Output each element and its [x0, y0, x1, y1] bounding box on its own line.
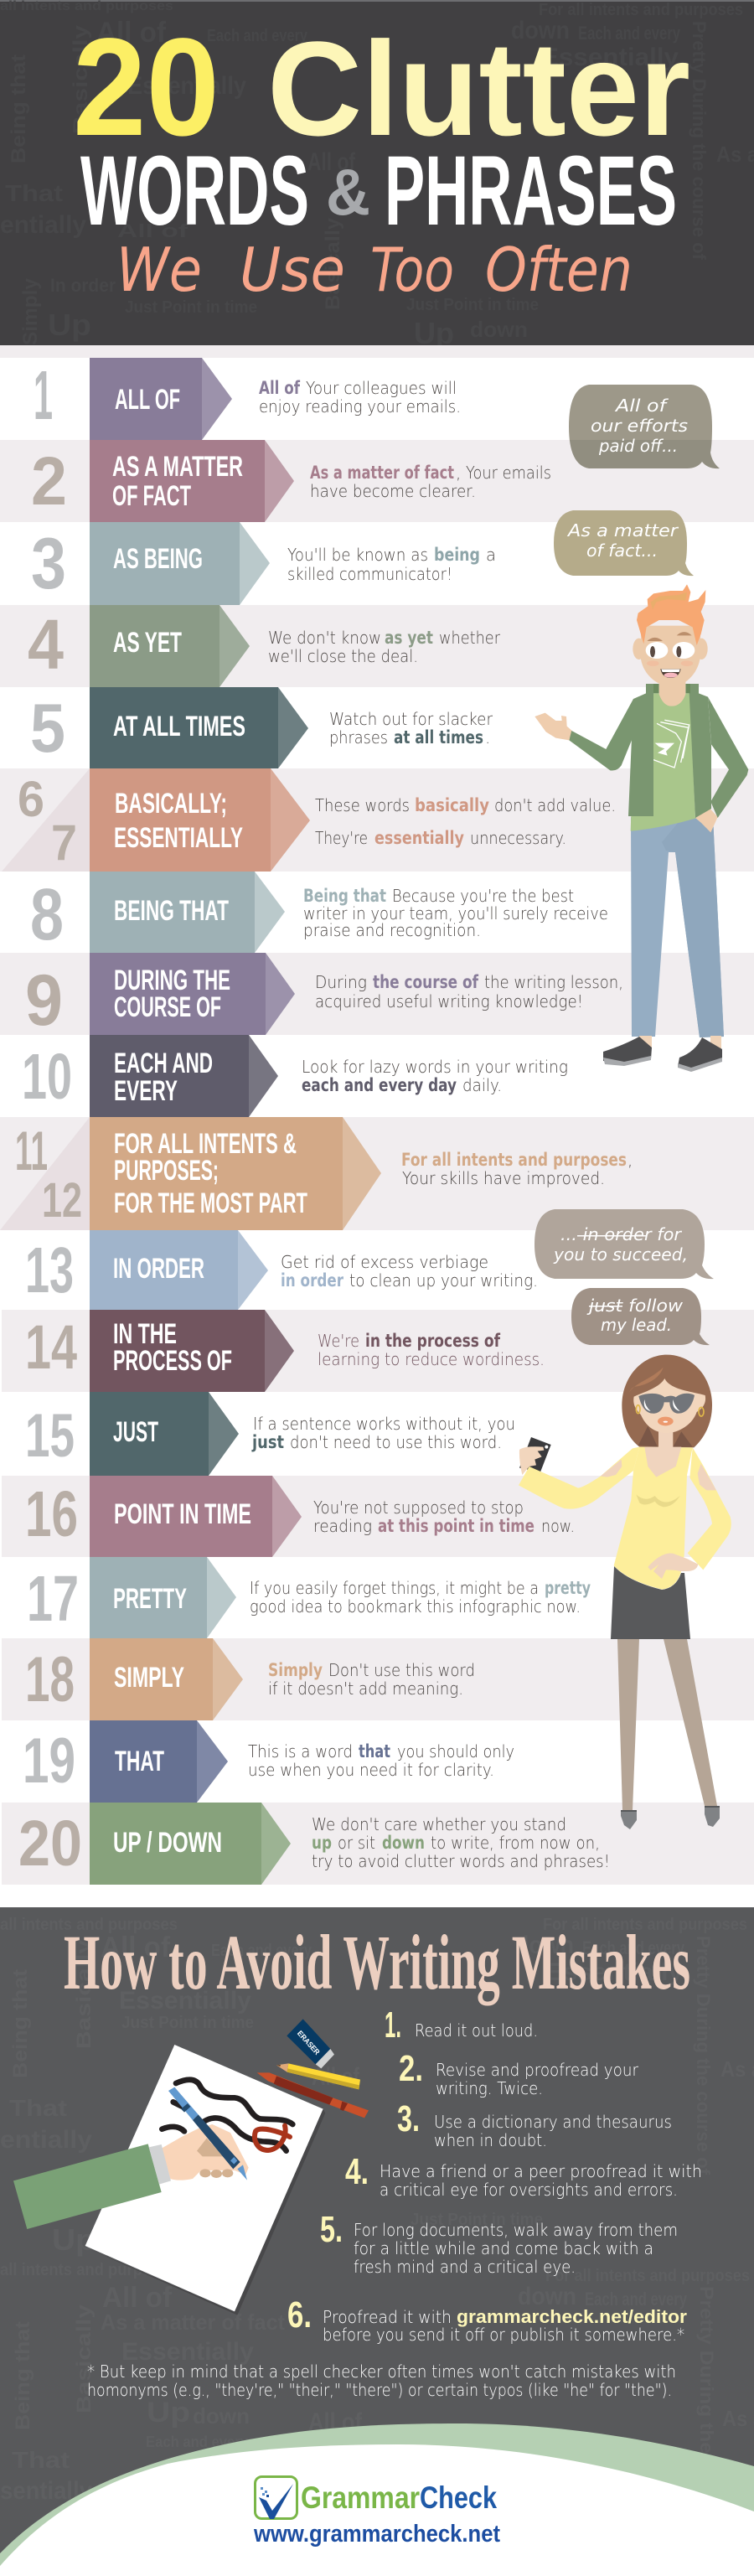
- example text 14: [318, 1331, 545, 1369]
- arrow: that: THAT: [115, 1746, 164, 1777]
- header panel: Basically: [322, 217, 344, 310]
- example text 5: [329, 709, 493, 747]
- icon: yellow pencil: [276, 2063, 360, 2089]
- header panel: Just Point in time: [406, 296, 539, 314]
- example text 14: learning to reduce wordiness.: [318, 1349, 545, 1369]
- number 3: 3: [31, 524, 66, 604]
- example text 3: a: [486, 545, 496, 565]
- example text 13: [281, 1252, 538, 1291]
- example text 8: Because you're the best: [392, 886, 574, 906]
- speech bubble: in order for you to succeed: ... in order for: [560, 1224, 683, 1244]
- example text 16: at this point in time: [378, 1516, 535, 1536]
- row 8: being that: [0, 872, 754, 955]
- panel: how to avoid writing mistakes: Each and every: [146, 2434, 248, 2450]
- website url: www.grammarcheck.net: [253, 2521, 500, 2548]
- header panel: entially: [0, 211, 86, 239]
- example text 11-12: Your skills have improved.: [402, 1168, 605, 1188]
- example text 17: pretty: [545, 1578, 591, 1598]
- step 5: [320, 2209, 678, 2277]
- panel: how to avoid writing mistakes: Essentially: [545, 1958, 683, 1986]
- panel: how to avoid writing mistakes: Being that: [12, 2321, 34, 2430]
- number 14: 14: [25, 1312, 77, 1382]
- example text 20: to write, from now on,: [431, 1833, 600, 1853]
- example text 20: up: [312, 1833, 332, 1853]
- number 6: 6: [18, 771, 44, 827]
- example text 8: writer in your team, you'll surely receive: [303, 903, 608, 923]
- arrow: as being: [90, 522, 270, 605]
- example text 11-12: For all intents and purposes: [401, 1150, 627, 1170]
- step 3: 3.: [397, 2098, 420, 2139]
- panel: how to avoid writing mistakes: Essentially: [119, 1987, 251, 2015]
- panel: how to avoid writing mistakes: all intents and purposes: [0, 2261, 178, 2279]
- example text 19: use when you need it for clarity.: [248, 1760, 494, 1780]
- speech bubble: all of our efforts paid off: paid off...: [598, 436, 678, 456]
- row 9: during the course of: [0, 953, 754, 1041]
- step 6: before you send it off or publish it somewhere.*: [323, 2325, 684, 2345]
- number 20: 20: [18, 1808, 82, 1880]
- step 6: 6.: [287, 2294, 312, 2335]
- panel: how to avoid writing mistakes: Up: [52, 2222, 96, 2257]
- arrow: as a matter of fact: OF FACT: [112, 480, 191, 512]
- panel: how to avoid writing mistakes: [0, 1907, 754, 2576]
- arrow: all of: [90, 358, 232, 440]
- speech bubble: as a matter of fact: [554, 510, 694, 576]
- example text 19: you should only: [397, 1741, 514, 1761]
- illustration: hand writing on paper: [13, 2045, 325, 2315]
- number 5: 5: [30, 689, 65, 767]
- example text 2: [310, 463, 551, 501]
- title: [73, 10, 690, 305]
- example text 19: [248, 1741, 514, 1780]
- subtitle: Often: [485, 235, 633, 305]
- number 12: 12: [42, 1173, 82, 1228]
- example text 1: Your colleagues will: [306, 378, 457, 398]
- example text 1: enjoy reading your emails.: [259, 396, 461, 416]
- arrow: being that: BEING THAT: [114, 895, 229, 927]
- example text 4: We don't know: [268, 628, 381, 648]
- example text 6-7: These words: [315, 795, 410, 815]
- panel: how to avoid writing mistakes: Each and every: [211, 1942, 312, 1960]
- header panel: down: [470, 317, 528, 342]
- arrow: in the process of: IN THE: [113, 1318, 177, 1350]
- example text 8: [303, 886, 608, 940]
- example text 6-7: don't add value.: [494, 795, 616, 815]
- panel: how to avoid writing mistakes: That: [12, 2447, 70, 2473]
- example text 6-7: unnecessary.: [470, 828, 566, 848]
- example text 10: each and every day: [302, 1075, 457, 1095]
- row 19: that: [0, 1720, 754, 1803]
- arrow: simply: [90, 1638, 243, 1720]
- speech bubble: just follow my lead: my lead.: [601, 1315, 672, 1335]
- example text 9: acquired useful writing knowledge!: [315, 991, 583, 1011]
- example text 20: down: [382, 1833, 425, 1853]
- example text 18: Don't use this word: [328, 1660, 475, 1680]
- panel: how to avoid writing mistakes: Just Point in time: [411, 2211, 543, 2229]
- row 6-7: basically; essentially: [0, 768, 754, 872]
- character: man: [535, 584, 748, 1072]
- row 4: as yet: [0, 605, 754, 687]
- arrow: during the course of: COURSE OF: [114, 991, 221, 1023]
- example text 2: Your emails: [466, 463, 551, 483]
- arrow: each and every: [90, 1035, 278, 1117]
- example text 4: as yet: [385, 628, 433, 648]
- example text 16: You're not supposed to stop: [313, 1497, 524, 1518]
- arrow: as a matter of fact: [90, 440, 294, 522]
- example text 16: reading: [313, 1516, 372, 1536]
- example text 4: [268, 628, 501, 666]
- arrow: in the process of: [90, 1310, 294, 1392]
- arrow: for all intents and purposes; for the most part: [90, 1117, 381, 1230]
- example text 20: [312, 1814, 610, 1871]
- arrow: as being: AS BEING: [113, 543, 203, 575]
- panel: how to avoid writing mistakes: Basically: [73, 1939, 96, 2049]
- example text 18: if it doesn't add meaning.: [268, 1679, 463, 1699]
- example text 11-12: [401, 1150, 633, 1188]
- row 17: pretty: [0, 1557, 754, 1638]
- speech bubble: as a matter of fact: of fact...: [586, 541, 658, 561]
- arrow: in order: IN ORDER: [113, 1253, 204, 1285]
- example text 10: Look for lazy words in your writing: [302, 1057, 568, 1077]
- example text 6-7: basically: [415, 795, 489, 815]
- number 4: 4: [28, 605, 64, 684]
- panel: how to avoid writing mistakes: entially: [0, 2126, 92, 2154]
- example text 4: we'll close the deal.: [268, 646, 418, 666]
- example text 8: Being that: [303, 886, 386, 906]
- panel: how to avoid writing mistakes: All of: [101, 1932, 171, 1963]
- panel: how to avoid writing mistakes: Up: [147, 2397, 190, 2429]
- step 4: Have a friend or a peer proofread it with: [380, 2161, 702, 2181]
- panel: how to avoid writing mistakes: Pretty During the: [696, 2286, 717, 2454]
- character: woman: [519, 1355, 731, 1829]
- header panel: Up: [414, 316, 454, 350]
- example text 13: to clean up your writing.: [349, 1270, 538, 1291]
- row 13: in order: [0, 1230, 754, 1310]
- arrow: each and every: EVERY: [114, 1075, 178, 1107]
- header panel: Being that: [8, 54, 30, 163]
- arrow: each and every: EACH AND: [114, 1047, 213, 1079]
- row 16: point in time: [2, 1476, 754, 1557]
- step 6: grammarcheck.net/editor: [457, 2306, 687, 2327]
- example text 19: This is a word: [248, 1741, 353, 1761]
- title: Words: WORDS: [80, 136, 309, 246]
- row 5: at all times: [0, 687, 754, 768]
- example text 9: the writing lesson,: [484, 972, 623, 992]
- step 4: a critical eye for oversights and errors.: [380, 2180, 678, 2200]
- step 4: 4.: [345, 2151, 369, 2192]
- example text 5: .: [485, 727, 490, 747]
- example text 19: that: [359, 1741, 390, 1761]
- step 2: writing. Twice.: [436, 2078, 543, 2098]
- steps list: [287, 2004, 702, 2345]
- header panel: All of: [96, 17, 167, 49]
- row 14: in the process of: [2, 1310, 754, 1392]
- example text 20: or sit: [338, 1833, 375, 1853]
- panel: how to avoid writing mistakes: all intents and purposes: [0, 1916, 178, 1934]
- step 3: [397, 2098, 672, 2150]
- example text 1: All of: [259, 378, 301, 398]
- arrow: pretty: [90, 1557, 236, 1638]
- example text 13: in order: [281, 1270, 344, 1291]
- number 10: 10: [22, 1041, 72, 1113]
- speech bubble: in order for you to succeed: you to succeed,: [553, 1244, 688, 1265]
- row 10: each and every: [0, 1035, 754, 1117]
- example text 15: don't need to use this word.: [290, 1432, 502, 1452]
- example text 5: phrases: [329, 727, 388, 747]
- example text 9: the course of: [373, 972, 479, 992]
- number 13: 13: [25, 1234, 74, 1306]
- example text 15: just: [251, 1432, 284, 1452]
- example text 1: [259, 378, 461, 416]
- arrow: as a matter of fact: AS A MATTER: [112, 451, 243, 483]
- subtitle: We: [116, 235, 202, 305]
- arrow: during the course of: [90, 953, 295, 1035]
- header panel: Up: [48, 308, 91, 342]
- row 3: as being: [0, 522, 754, 605]
- speech bubble: all of our efforts paid off: [569, 385, 720, 468]
- arrow: in the process of: PROCESS OF: [113, 1345, 232, 1377]
- number 16: 16: [25, 1478, 78, 1550]
- example text 17: good idea to bookmark this infographic now.: [250, 1596, 581, 1616]
- arrow: up / down: [90, 1803, 291, 1885]
- arrow: for all intents and purposes; for the most part: FOR ALL INTENTS &: [114, 1128, 297, 1160]
- header panel: That: [5, 180, 63, 206]
- panel: how to avoid writing mistakes: All of: [308, 2408, 363, 2436]
- icon: eraser: [287, 2019, 334, 2068]
- step 1: [385, 2004, 538, 2046]
- header panel: Pretty During the course of: [689, 21, 710, 261]
- example text 2: have become clearer.: [310, 481, 476, 501]
- arrow: as yet: [90, 605, 250, 687]
- number 9: 9: [25, 960, 63, 1041]
- speech bubble: all of our efforts paid off: All of: [614, 396, 669, 416]
- arrow: being that: [90, 872, 285, 953]
- panel: how to avoid writing mistakes: Each and every: [582, 1937, 685, 1958]
- arrow: all of: ALL OF: [115, 384, 180, 416]
- step 2: Revise and proofread your: [436, 2060, 639, 2080]
- arrow: basically; essentially: BASICALLY;: [115, 788, 227, 820]
- speech bubble: just follow my lead: just follow: [586, 1296, 684, 1316]
- header panel: Each and every: [207, 27, 308, 45]
- step 5: for a little while and come back with a: [354, 2238, 653, 2258]
- example text 10: [302, 1057, 568, 1095]
- number 17: 17: [27, 1563, 79, 1635]
- header panel: All of: [307, 148, 356, 176]
- example text 20: try to avoid clutter words and phrases!: [312, 1851, 610, 1871]
- footnote: * But keep in mind that a spell checker often times won't catch mistakes with: [87, 2361, 676, 2382]
- example text 20: We don't care whether you stand: [312, 1814, 566, 1834]
- example text 11-12: ,: [627, 1150, 633, 1170]
- example text 15: [251, 1414, 515, 1452]
- arrow: basically; essentially: [90, 768, 310, 872]
- number 15: 15: [25, 1402, 75, 1470]
- example text 6-7: essentially: [374, 828, 464, 848]
- header panel: All of: [117, 220, 188, 241]
- example text 8: praise and recognition.: [303, 920, 481, 940]
- step 3: Use a dictionary and thesaurus: [434, 2112, 672, 2132]
- arrow: for all intents and purposes; for the most part: PURPOSES;: [114, 1155, 219, 1187]
- arrow: in order: [90, 1230, 268, 1310]
- footnote: [87, 2361, 676, 2400]
- panel: how to avoid writing mistakes: All of: [312, 2063, 360, 2091]
- example text 2: As a matter of fact: [310, 463, 454, 483]
- example text 17: If you easily forget things, it might be a: [250, 1578, 539, 1598]
- arrow: pretty: PRETTY: [113, 1583, 187, 1615]
- subtitle: Use: [240, 235, 345, 305]
- panel: how to avoid writing mistakes: All of: [102, 2282, 173, 2314]
- example text 14: in the process of: [365, 1331, 501, 1351]
- header panel: Essentially: [541, 44, 679, 71]
- example text 4: whether: [439, 628, 501, 648]
- speech bubble: in order for you to succeed: [535, 1209, 714, 1279]
- example text 9: [315, 972, 623, 1011]
- step 1: Read it out loud.: [415, 2020, 538, 2041]
- header panel: down: [511, 17, 570, 44]
- footer arc: [0, 2423, 754, 2576]
- header panel: Each and every: [578, 23, 681, 44]
- panel: how to avoid writing mistakes: sentially: [0, 2477, 92, 2505]
- panel: how to avoid writing mistakes: As a matter of fact: [101, 2310, 285, 2335]
- step 4: [345, 2151, 702, 2200]
- number 8: 8: [30, 874, 64, 955]
- row 11-12: for all intents and purposes; for the most part: [0, 1117, 754, 1230]
- panel: how to avoid writing mistakes: Being that: [9, 1969, 32, 2078]
- step 2: [399, 2048, 639, 2098]
- icon: eraser: ERASER: [296, 2029, 322, 2056]
- number 7: 7: [51, 815, 77, 871]
- arrow: during the course of: DURING THE: [114, 965, 230, 996]
- header panel: [0, 0, 754, 350]
- footnote: homonyms (e.g., "they're," "their," "there") or certain typos (like "he" for "the").: [87, 2380, 672, 2400]
- example text 10: daily.: [462, 1075, 502, 1095]
- example text 3: being: [434, 545, 480, 565]
- example text 16: [313, 1497, 575, 1536]
- logo: grammarcheck: [253, 2477, 500, 2548]
- speech bubble: as a matter of fact: As a matter: [566, 520, 679, 541]
- speech bubble: just follow my lead: [571, 1288, 710, 1345]
- title: Clutter: Clutter: [267, 13, 690, 163]
- panel: how to avoid writing mistakes: down: [193, 2403, 250, 2429]
- example text 6-7: [315, 795, 616, 848]
- step 6: [287, 2294, 687, 2345]
- step 1: 1.: [385, 2004, 401, 2046]
- row 15: just: [0, 1392, 754, 1476]
- example text 14: We're: [318, 1331, 359, 1351]
- arrow: basically; essentially: ESSENTIALLY: [114, 822, 243, 854]
- row 2: as a matter of fact: [0, 440, 754, 522]
- row 18: simply: [2, 1638, 754, 1720]
- example text 18: Simply: [268, 1660, 323, 1680]
- icon: red crayon: [257, 2072, 369, 2118]
- step 3: when in doubt.: [434, 2130, 547, 2150]
- arrow: just: JUST: [113, 1416, 158, 1448]
- example text 17: [250, 1578, 591, 1616]
- header panel: Essentially: [127, 72, 246, 100]
- number 11: 11: [15, 1120, 48, 1182]
- step 5: 5.: [320, 2209, 343, 2250]
- step 2: 2.: [399, 2048, 423, 2089]
- panel: how to avoid writing mistakes: Basically: [73, 2304, 96, 2413]
- example text 3: [287, 545, 496, 584]
- number 19: 19: [23, 1725, 75, 1797]
- number 18: 18: [25, 1644, 75, 1715]
- row 20: up / down: [2, 1803, 754, 1885]
- example text 3: skilled communicator!: [287, 564, 452, 584]
- arrow: as yet: AS YET: [113, 627, 182, 659]
- example text 3: You'll be known as: [287, 545, 428, 565]
- title: 20: 20: [73, 10, 219, 165]
- panel: how to avoid writing mistakes: Each and every: [585, 2289, 688, 2310]
- arrow: that: [90, 1720, 228, 1803]
- header panel: Just Point in time: [125, 298, 257, 317]
- row 1: all of: 1: [34, 356, 53, 434]
- example text 5: Watch out for slacker: [329, 709, 493, 729]
- header panel: In order: [50, 275, 116, 296]
- example text 16: now.: [541, 1516, 575, 1536]
- subtitle: [116, 235, 633, 305]
- example text 2: ,: [456, 463, 461, 483]
- panel: how to avoid writing mistakes: Essentially: [121, 2338, 254, 2366]
- example text 15: If a sentence works without it, you: [253, 1414, 515, 1434]
- panel: how to avoid writing mistakes: Just Point in time: [121, 2014, 254, 2032]
- header panel: Basically: [70, 24, 92, 134]
- header panel: Simply: [19, 277, 42, 345]
- step 5: For long documents, walk away from them: [354, 2220, 678, 2240]
- wordmark: Check: [420, 2480, 497, 2515]
- subtitle: Too: [370, 235, 454, 305]
- arrow: up / down: UP / DOWN: [113, 1827, 222, 1859]
- panel: how to avoid writing mistakes: down: [518, 2283, 576, 2310]
- panel: how to avoid writing mistakes: Pretty During the course of: [693, 1936, 714, 2175]
- arrow: for all intents and purposes; for the most part: FOR THE MOST PART: [114, 1187, 307, 1219]
- arrow: simply: SIMPLY: [114, 1662, 184, 1694]
- example text 5: at all times: [394, 727, 483, 747]
- wordmark: Grammar: [301, 2480, 420, 2515]
- arrow: point in time: [90, 1476, 302, 1557]
- speech bubble: all of our efforts paid off: our efforts: [591, 416, 688, 436]
- number 2: 2: [31, 443, 67, 520]
- example text 18: [268, 1660, 475, 1699]
- example text 6-7: They're: [315, 828, 368, 848]
- example text 9: During: [315, 972, 367, 992]
- step 6: Proofread it with: [323, 2307, 452, 2327]
- icon: logo checkmark: [255, 2477, 297, 2519]
- panel: how to avoid writing mistakes: down: [515, 1932, 574, 1959]
- step 5: fresh mind and a critical eye.: [354, 2257, 576, 2277]
- title: ampersand: &: [326, 155, 370, 229]
- arrow: at all times: AT ALL TIMES: [113, 711, 245, 742]
- example text 13: Get rid of excess verbiage: [281, 1252, 488, 1272]
- panel: how to avoid writing mistakes: That: [9, 2095, 67, 2121]
- arrow: at all times: [90, 687, 308, 768]
- arrow: just: [90, 1392, 239, 1476]
- arrow: point in time: POINT IN TIME: [114, 1498, 251, 1530]
- row 1: all of: [0, 356, 754, 440]
